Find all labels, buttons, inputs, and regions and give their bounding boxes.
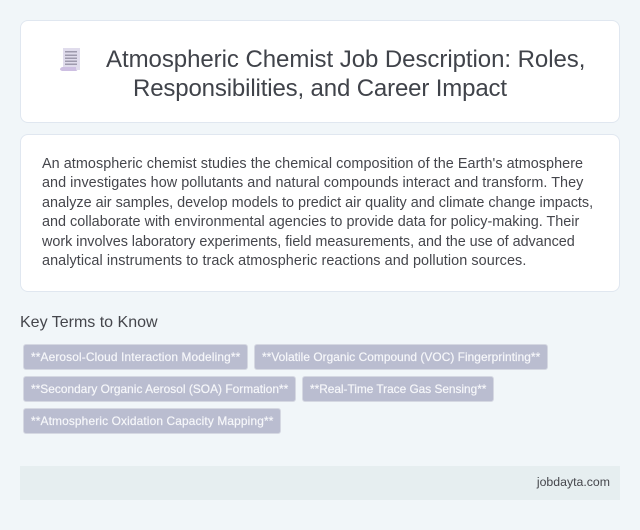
description text xyxy=(42,156,593,269)
tag: **Secondary Organic Aerosol (SOA) Formation** xyxy=(31,382,288,396)
heading: key terms: Key Terms to Know xyxy=(20,314,158,331)
title xyxy=(106,46,585,102)
tag: **Real-Time Trace Gas Sensing** xyxy=(310,382,486,396)
tag xyxy=(23,408,281,434)
tag list xyxy=(23,344,548,434)
footer bar xyxy=(20,466,620,500)
description text: An atmospheric chemist studies the chemical composition of the Earth's atmosphere xyxy=(42,156,583,172)
description text: analytical instruments to track atmospheric reactions and pollution sources. xyxy=(42,253,526,269)
description text: analyze air samples, develop models to predict air quality and climate change impacts, xyxy=(42,195,593,211)
tag: **Atmospheric Oxidation Capacity Mapping** xyxy=(31,414,274,428)
tag xyxy=(254,344,548,370)
title: Atmospheric Chemist Job Description: Roles, xyxy=(106,46,585,73)
tag xyxy=(23,344,248,370)
title: Responsibilities, and Career Impact xyxy=(133,75,507,102)
footer text: source: jobdayta.com xyxy=(537,475,610,489)
tag xyxy=(23,376,296,402)
description text: work involves laboratory experiments, field measurements, and the use of advanced xyxy=(42,234,575,250)
tag xyxy=(302,376,494,402)
panel: title card xyxy=(20,20,620,123)
tag: **Volatile Organic Compound (VOC) Fingerprinting** xyxy=(262,350,540,364)
description text: and investigates how pollutants and natural compounds interact and transform. They xyxy=(42,175,583,191)
icon: document scroll xyxy=(60,48,80,71)
description text: and collaborate with environmental agencies to provide data for policy-making. Their xyxy=(42,214,579,230)
tag: **Aerosol-Cloud Interaction Modeling** xyxy=(31,350,240,364)
panel: description xyxy=(20,134,620,292)
